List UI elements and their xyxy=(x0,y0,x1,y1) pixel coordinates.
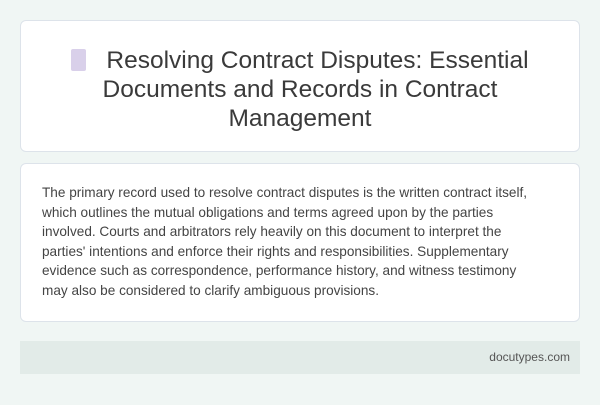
footer text: source: docutypes.com xyxy=(489,350,570,364)
body text card xyxy=(20,163,580,322)
icon: scroll xyxy=(71,49,86,71)
title: Resolving Contract Disputes: Essential Documents and Records in Contract Management xyxy=(103,47,529,132)
footer xyxy=(20,341,580,374)
description: The primary record used to resolve contract disputes is the written contract itself, which outlines the mutual obligations and terms agreed upon by the parties involved. Courts and arbitrators rely heavily on this document to interpret the parties' intentions and enforce their rights and responsibilities. Supplementary evidence such as correspondence, performance history, and witness testimony may also be considered to clarify ambiguous provisions. xyxy=(42,185,527,298)
header card xyxy=(20,20,580,152)
